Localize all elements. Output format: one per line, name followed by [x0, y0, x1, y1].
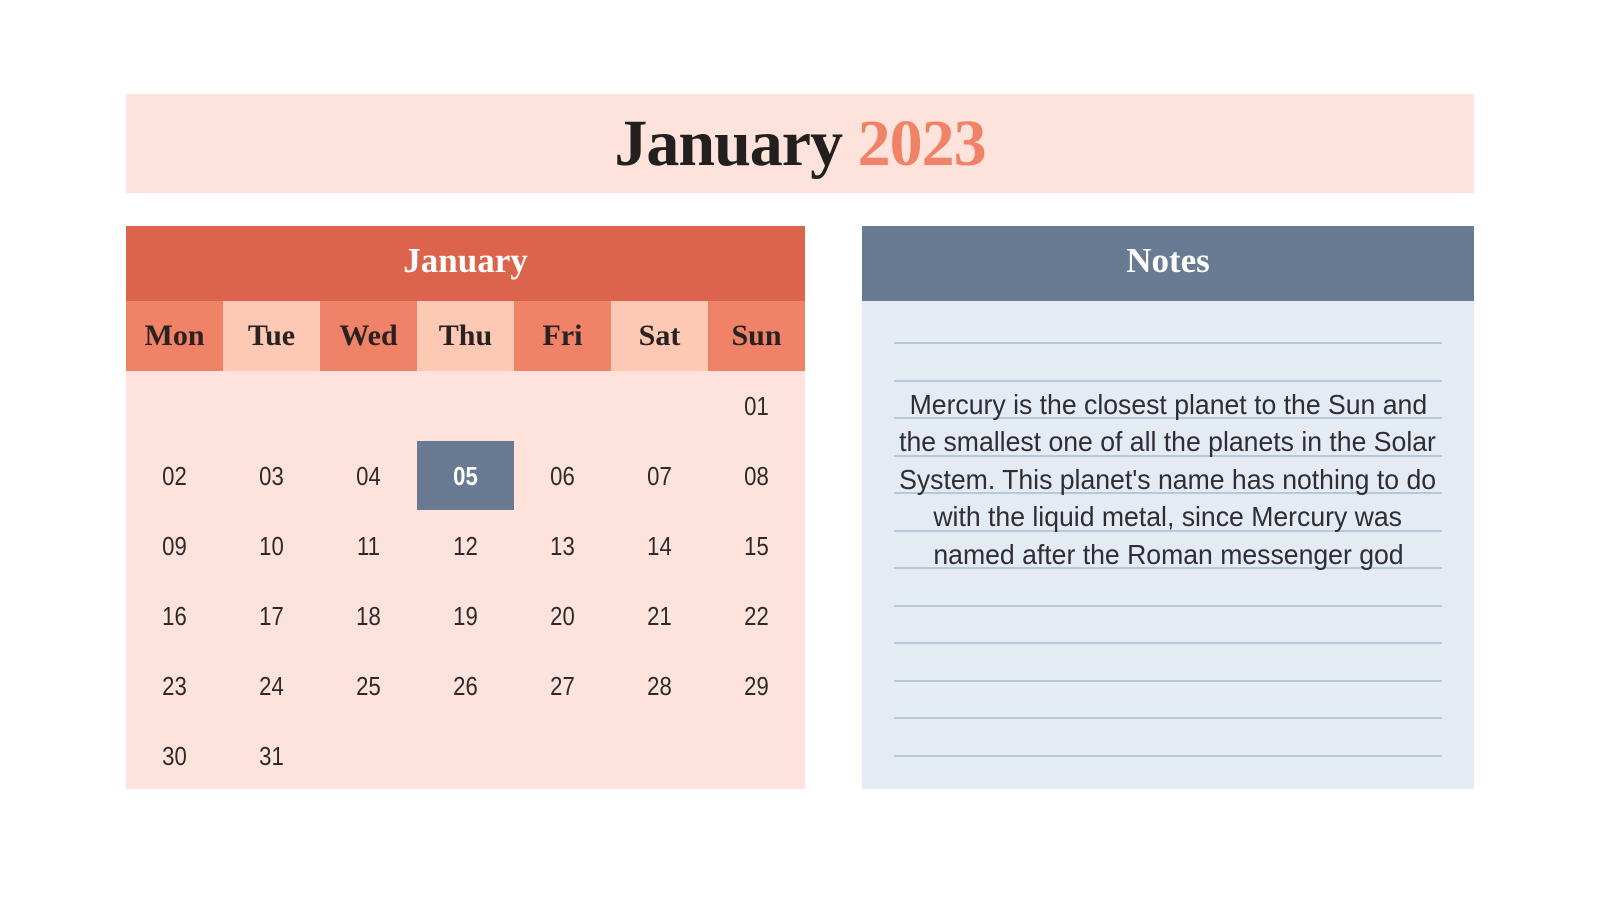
text: 20 — [550, 601, 575, 631]
text: 27 — [550, 671, 575, 701]
text: 06 — [550, 461, 575, 491]
text: 10 — [259, 531, 284, 561]
text: Wed — [339, 319, 398, 352]
notes header: Notes — [1126, 241, 1210, 280]
text: 12 — [453, 531, 478, 561]
text: Thu — [439, 319, 492, 352]
text: 24 — [259, 671, 284, 701]
text: Sat — [639, 319, 680, 352]
text: Tue — [248, 319, 295, 352]
notes header — [862, 226, 1474, 301]
text: 16 — [162, 601, 187, 631]
text: 26 — [453, 671, 478, 701]
text: 19 — [453, 601, 478, 631]
notes text: named after the Roman messenger god — [933, 539, 1403, 570]
panel: notes — [862, 226, 1474, 789]
text: 09 — [162, 531, 187, 561]
text: 18 — [356, 601, 381, 631]
text: 28 — [647, 671, 672, 701]
dates grid — [162, 391, 769, 771]
notes text — [900, 389, 1436, 570]
weekday row — [126, 301, 805, 371]
text: 23 — [162, 671, 187, 701]
text: Fri — [542, 319, 582, 352]
highlight: 05 — [417, 441, 514, 510]
text: 30 — [162, 741, 187, 771]
text: 21 — [647, 601, 672, 631]
text: 07 — [647, 461, 672, 491]
notes text: the smallest one of all the planets in the Solar — [900, 426, 1436, 457]
notes text: System. This planet's name has nothing to do — [900, 464, 1436, 495]
notes text: with the liquid metal, since Mercury was — [934, 501, 1402, 532]
text: 17 — [259, 601, 284, 631]
text: Sun — [731, 319, 782, 352]
text: 13 — [550, 531, 575, 561]
text: 22 — [744, 601, 769, 631]
title band — [126, 94, 1474, 193]
text: 29 — [744, 671, 769, 701]
text: 01 — [744, 391, 769, 421]
text: 03 — [259, 461, 284, 491]
text: 14 — [647, 531, 672, 561]
text: 25 — [356, 671, 381, 701]
text: 11 — [357, 531, 380, 561]
text: 15 — [744, 531, 769, 561]
text: 02 — [162, 461, 187, 491]
title: January 2023 — [614, 107, 986, 180]
panel: calendar — [126, 226, 805, 789]
text: Mon — [144, 319, 204, 352]
notes text: Mercury is the closest planet to the Sun and — [909, 389, 1427, 420]
text: 04 — [356, 461, 381, 491]
text: 31 — [259, 741, 284, 771]
text: 05 — [453, 461, 478, 491]
calendar header: January — [403, 241, 528, 280]
text: 08 — [744, 461, 769, 491]
calendar header — [126, 226, 805, 301]
